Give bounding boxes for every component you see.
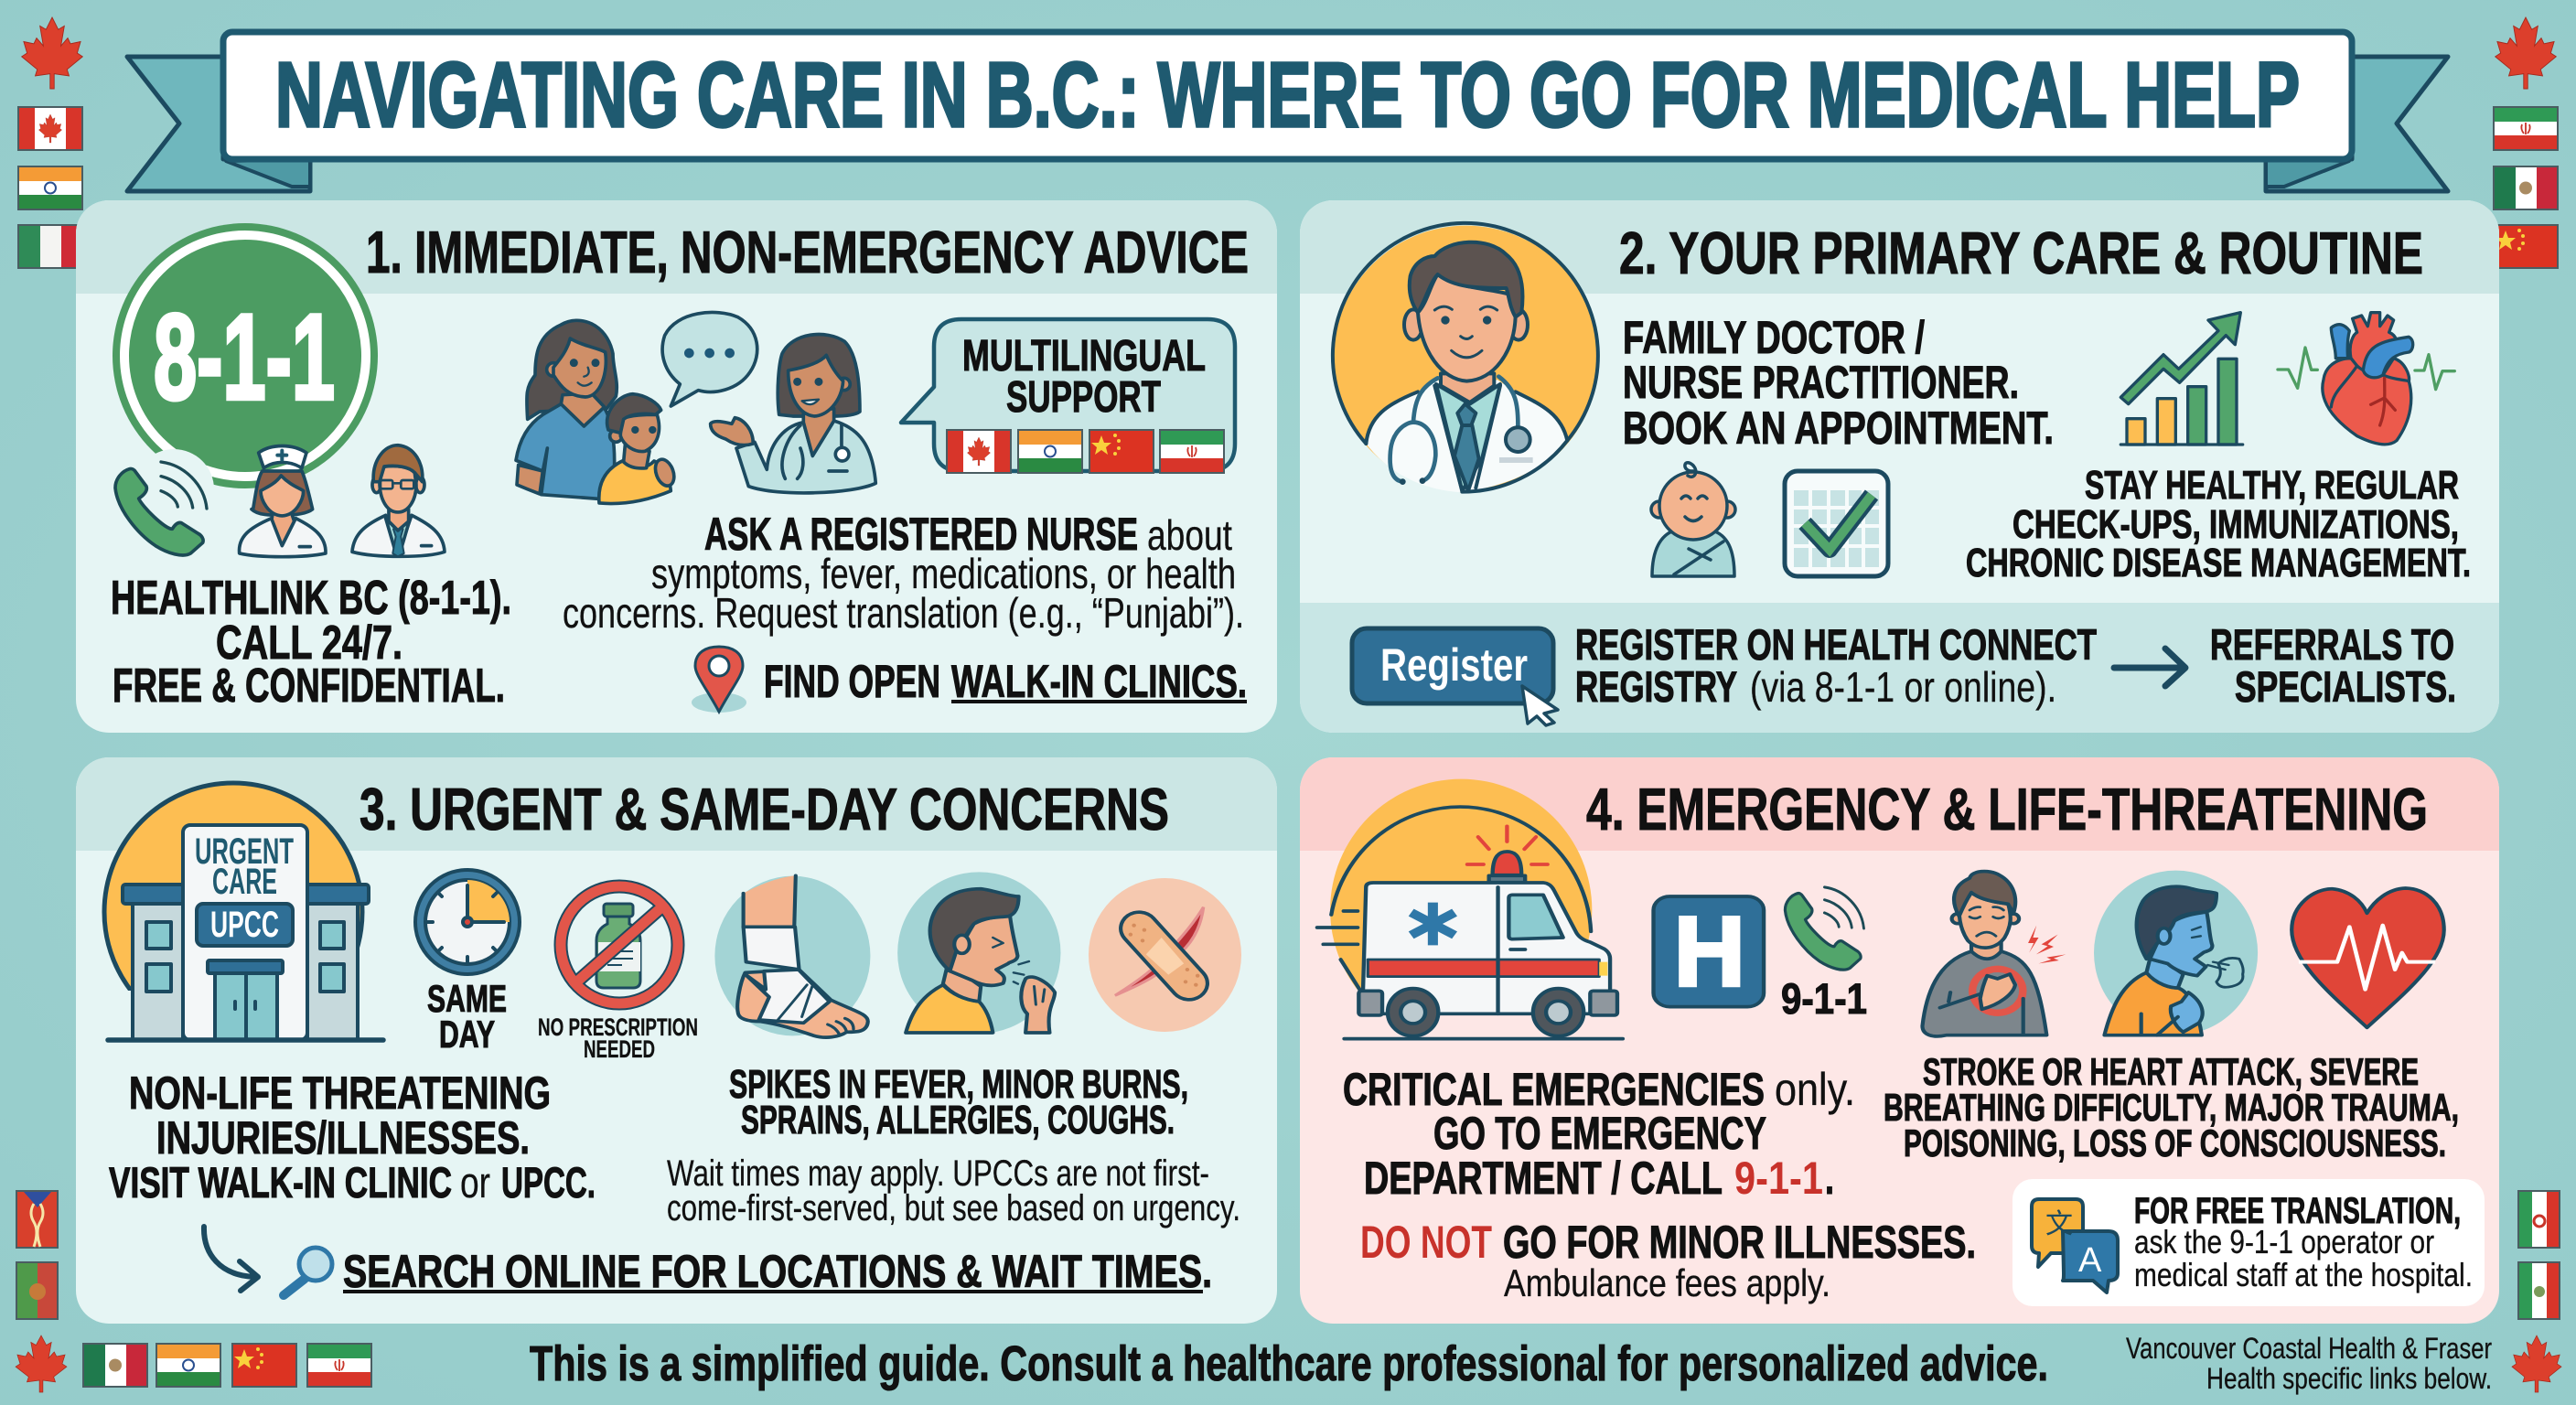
right flags column [2494,17,2558,268]
same day label [427,977,507,1056]
nurse advice text: ASK A REGISTERED NURSE [704,509,1138,560]
icon: phone 911 [1781,887,1867,1023]
translation callout: ask the 9-1-1 operator or [2134,1223,2434,1260]
icon: nurse [240,445,326,557]
icon: speech bubble [662,312,757,406]
heading 1: 1. IMMEDIATE, NON-EMERGENCY ADVICE [366,219,1249,285]
icon: growth chart [2120,313,2243,445]
icon: breathing difficulty [2094,871,2258,1035]
footer links note: Health specific links below. [2206,1362,2492,1395]
non-life threatening text: UPCC. [501,1158,596,1207]
icon: mother and child [516,320,678,504]
healthlink text: CALL 24/7. [216,617,402,670]
nurse advice text [563,509,1244,637]
panel 3: urgent care [76,757,1277,1324]
icon: urgent care building: UPCC [210,905,279,945]
walk-in clinics link: WALK-IN CLINICS. [951,656,1247,707]
side flags left [16,1191,58,1319]
icon: chest pain [1922,872,2066,1036]
do not warning: GO FOR MINOR ILLNESSES. [1503,1217,1976,1268]
no prescription label: NO PRESCRIPTION [538,1014,698,1041]
critical emergencies text: GO TO EMERGENCY [1433,1108,1766,1159]
icon: phone 911: 9-1-1 [1781,974,1867,1023]
same day label: SAME [427,977,507,1020]
non-life threatening text: VISIT WALK-IN CLINIC [109,1158,452,1207]
critical emergencies text: 9-1-1 [1734,1153,1823,1204]
icon: translate: 文 [2045,1209,2073,1239]
registry text: REGISTRY [1575,662,1737,711]
icon: magnifier [284,1248,332,1295]
heading 3: 3. URGENT & SAME-DAY CONCERNS [360,776,1169,842]
wait times note [667,1153,1240,1228]
icon: bandaged ankle [714,875,870,1037]
icon: phone [115,462,207,555]
icon: no prescription [561,886,678,1003]
translation callout [2012,1179,2485,1306]
side flags right [2518,1191,2560,1319]
panel 2: primary care [1300,200,2499,733]
title box [223,32,2352,159]
referrals text [2210,620,2456,711]
icon: doctor [352,445,445,556]
panel 1: immediate advice [76,200,1277,733]
no prescription label [538,1014,698,1063]
walk-in clinics link [764,656,1247,707]
arrow to referrals [2114,649,2185,686]
non-life threatening text: NON-LIFE THREATENING [129,1067,551,1119]
nurse advice text: concerns. Request translation (e.g., “Punjabi”). [563,589,1244,637]
symptoms text: SPIKES IN FEVER, MINOR BURNS, [729,1062,1188,1107]
footer disclaimer: This is a simplified guide. Consult a healthcare professional for personalized advice. [530,1336,2048,1391]
icon: translate: A [2078,1241,2102,1280]
wait times note: Wait times may apply. UPCCs are not first- [667,1153,1209,1194]
life-threatening symptoms [1884,1050,2459,1164]
non-life threatening text [109,1067,596,1207]
multilingual callout: MULTILINGUAL [962,332,1206,381]
non-life threatening text: INJURIES/ILLNESSES. [156,1112,530,1164]
icon: ambulance [1317,779,1623,1041]
wait times note: come-first-served, but see based on urgency. [667,1188,1240,1228]
nurse advice text: about [1147,511,1232,559]
icon: person coughing [897,872,1060,1034]
non-life threatening text: or [460,1158,490,1207]
same day label: DAY [439,1013,495,1056]
family doctor text: FAMILY DOCTOR / [1623,312,1925,363]
critical emergencies text: CRITICAL EMERGENCIES [1343,1064,1765,1115]
do not warning [1360,1217,1976,1304]
bottom flags [16,1335,371,1392]
register button [1352,628,1558,725]
routine care text [1966,463,2471,585]
healthlink text: FREE & CONFIDENTIAL. [113,660,505,713]
symptoms text [729,1062,1188,1142]
bottom right leaf [2512,1335,2561,1392]
multilingual callout [901,319,1235,473]
icon: urgent care building: URGENT [195,831,294,872]
footer links note [2126,1332,2492,1395]
critical emergencies text [1343,1064,1855,1204]
icon: family doctor [1333,223,1599,492]
8-1-1 badge: 8-1-1 [154,290,335,425]
critical emergencies text: only. [1775,1064,1855,1115]
nurse advice text: symptoms, fever, medications, or health [651,550,1236,597]
multilingual callout: SUPPORT [1006,373,1161,422]
icon: urgent care building [104,783,383,1041]
critical emergencies text: DEPARTMENT / CALL [1364,1153,1723,1204]
search link: SEARCH ONLINE FOR LOCATIONS & WAIT TIMES. [343,1246,1212,1297]
left flags column [18,17,82,268]
icon: urgent care building: CARE [212,862,277,902]
register button: Register [1380,639,1528,691]
ribbon right [2266,57,2448,191]
family doctor text: NURSE PRACTITIONER. [1623,357,2019,408]
footer links note: Vancouver Coastal Health & Fraser [2126,1332,2492,1365]
icon: calendar check [1785,471,1888,576]
ribbon left [127,57,310,191]
icon: bandage on cut [1089,878,1241,1032]
symptoms text: SPRAINS, ALLERGIES, COUGHS. [741,1098,1175,1142]
no prescription label: NEEDED [584,1035,655,1063]
do not warning: Ambulance fees apply. [1504,1261,1830,1304]
icon: heart with ecg [2292,888,2444,1027]
critical emergencies text: . [1825,1153,1834,1204]
walk-in clinics link: FIND OPEN [764,656,940,707]
icon: clock [415,870,520,974]
icon: hospital sign [1654,896,1764,1007]
8-1-1 badge [113,223,378,488]
referrals text: SPECIALISTS. [2235,662,2456,711]
icon: map pin [692,647,746,713]
do not warning: DO NOT [1360,1217,1492,1268]
registry text [1575,620,2097,711]
curved arrow [204,1227,258,1291]
healthlink text: HEALTHLINK BC (8-1-1). [111,572,511,625]
family doctor text [1623,312,2054,454]
icon: baby [1651,463,1735,576]
family doctor text: BOOK AN APPOINTMENT. [1623,402,2054,454]
icon: anatomical heart [2278,313,2454,445]
icon: nurse with stethoscope [711,335,875,493]
icon: translate [2032,1199,2118,1292]
translation callout: medical staff at the hospital. [2134,1256,2473,1293]
panel 4: emergency [1300,757,2499,1324]
registry text: (via 8-1-1 or online). [1750,663,2056,711]
referrals text: REFERRALS TO [2210,620,2454,669]
title banner [127,32,2448,191]
healthlink text [111,572,511,713]
registry text: REGISTER ON HEALTH CONNECT [1575,620,2097,669]
